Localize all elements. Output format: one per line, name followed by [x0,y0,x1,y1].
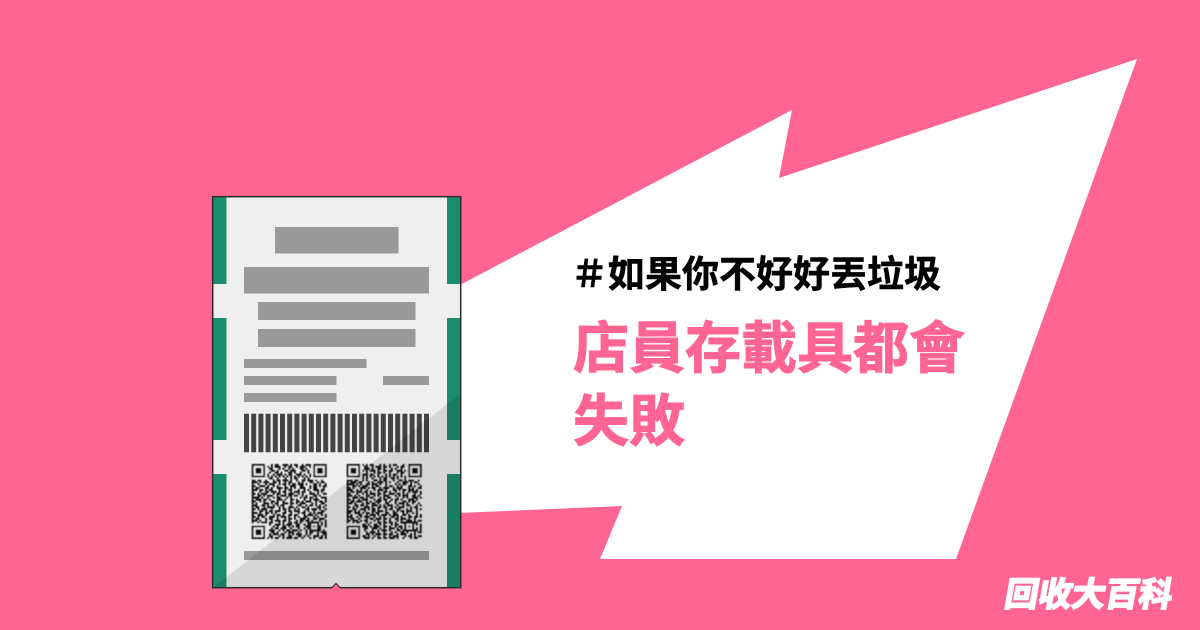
brand logo: 回收大百科 [1002,577,1176,614]
speech bubble [458,59,1137,559]
receipt notch [331,584,341,588]
main headline: 店員存載具都會失敗 [573,317,965,453]
hashtag heading: ＃如果你不好好丟垃圾 [571,254,941,295]
left green strips [214,198,226,587]
receipt diagonal shadow [214,394,460,587]
receipt text placeholders [244,227,429,402]
QR finder patterns [347,464,422,539]
QR code right [347,464,422,539]
barcode [244,414,430,452]
QR finder patterns [252,464,327,539]
right green strips [447,198,460,587]
QR code left [252,464,327,539]
receipt [213,197,461,588]
receipt paper [213,197,461,588]
bottom bar [244,551,429,560]
